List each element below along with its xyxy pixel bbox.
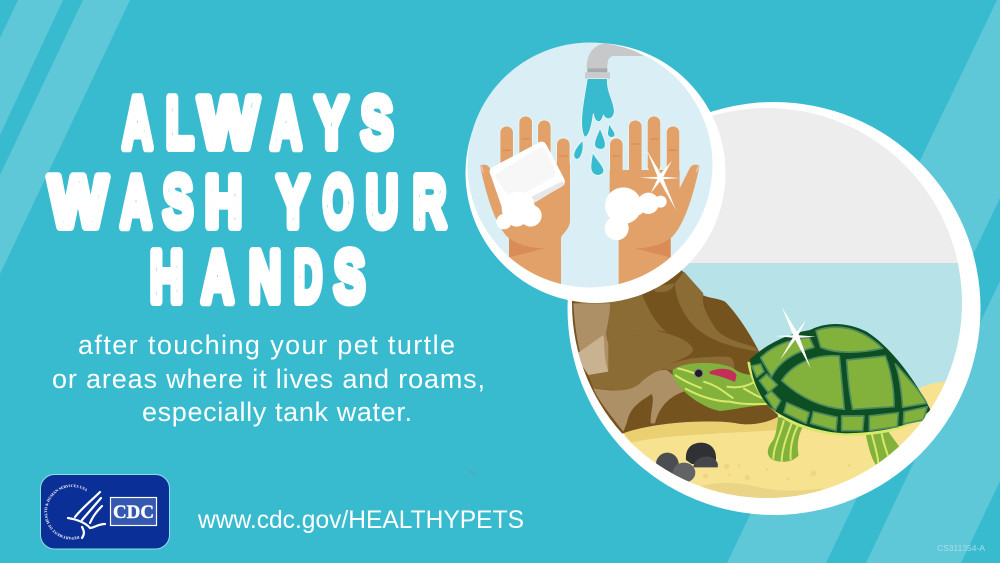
turtle scene — [572, 108, 962, 498]
faucet — [585, 43, 644, 79]
title line 3: H — [150, 238, 183, 318]
subtitle text: especially tank water. — [142, 397, 412, 427]
subtitle text — [52, 330, 485, 427]
water — [574, 79, 615, 175]
title: always wash your hands — [49, 84, 446, 318]
title line 1: Y — [315, 84, 348, 164]
turtle legs — [768, 417, 899, 466]
panel: turtle circle — [560, 100, 980, 527]
subtitle text: or areas where it lives and roams, — [52, 364, 485, 394]
title line 2: A — [120, 162, 152, 242]
title line 1: A — [122, 84, 152, 164]
title line 3: S — [334, 238, 365, 318]
title line 3: N — [249, 238, 281, 318]
title line 1: S — [361, 84, 393, 164]
title line 1: L — [166, 84, 194, 164]
logo: HHS and CDC — [40, 474, 170, 550]
right hand — [610, 116, 700, 288]
sparkle on shell — [775, 307, 816, 368]
title line 2: Y — [277, 162, 309, 242]
title line 2: R — [413, 162, 446, 242]
url: www.cdc.gov/HEALTHYPETS — [197, 506, 524, 534]
HHS eagle — [68, 492, 105, 538]
rock — [570, 270, 778, 433]
clearance code: CS311354-A — [937, 544, 986, 553]
title line 1: A — [270, 84, 302, 164]
small mark — [468, 470, 476, 476]
turtle — [673, 324, 931, 466]
turtle head — [673, 363, 768, 411]
title line 3: D — [294, 238, 322, 318]
soap foam left — [496, 202, 542, 230]
stones — [656, 443, 718, 483]
turtle shell — [747, 324, 931, 436]
title line 2: H — [205, 162, 242, 242]
panel: handwashing circle — [466, 42, 726, 303]
title line 3: A — [202, 238, 234, 318]
title line 1: W — [199, 84, 258, 164]
sparkle on hand — [640, 150, 680, 210]
title line 2: O — [323, 162, 353, 242]
sand — [624, 382, 946, 498]
title line 2: U — [366, 162, 398, 242]
left hand — [480, 116, 570, 288]
title line 2: S — [163, 162, 193, 242]
soap bar — [490, 142, 565, 208]
title line 2: W — [49, 162, 107, 242]
subtitle text: after touching your pet turtle — [78, 330, 455, 360]
HHS seal text: DEPARTMENT OF HEALTH & HUMAN SERVICES USA — [44, 484, 87, 540]
soap foam right — [605, 187, 667, 240]
CDC mark: CDC — [113, 503, 154, 523]
